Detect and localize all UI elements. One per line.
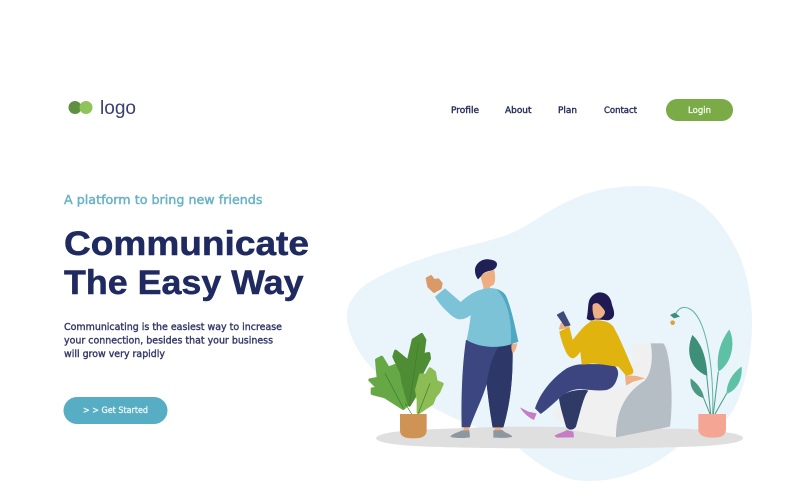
navigation: Contact — [604, 106, 638, 116]
logo: logo — [100, 98, 136, 119]
illustration: left plant — [370, 335, 442, 438]
illustration: armchair — [552, 343, 672, 437]
description: your connection, besides that your business — [64, 336, 273, 346]
description: Communicating is the easiest way to increase — [64, 322, 282, 333]
get started button — [64, 397, 168, 424]
login button: Login — [688, 106, 711, 116]
floor shadow — [376, 427, 743, 448]
navigation: Plan — [558, 106, 577, 116]
illustration: right plant — [670, 307, 742, 438]
logo — [68, 98, 136, 119]
description — [64, 322, 282, 360]
tagline: A platform to bring new friends — [64, 192, 262, 207]
navigation — [451, 106, 638, 116]
title: Communicate — [64, 225, 309, 263]
navigation: About — [505, 106, 532, 116]
title — [64, 225, 309, 302]
illustration: standing man — [427, 259, 518, 438]
illustration: seated woman — [520, 292, 645, 438]
description: will grow very rapidly — [64, 349, 165, 360]
get started button: > > Get Started — [83, 406, 148, 416]
login button — [666, 99, 733, 121]
background blob — [347, 186, 752, 481]
title: The Easy Way — [64, 264, 304, 302]
navigation: Profile — [451, 106, 479, 116]
